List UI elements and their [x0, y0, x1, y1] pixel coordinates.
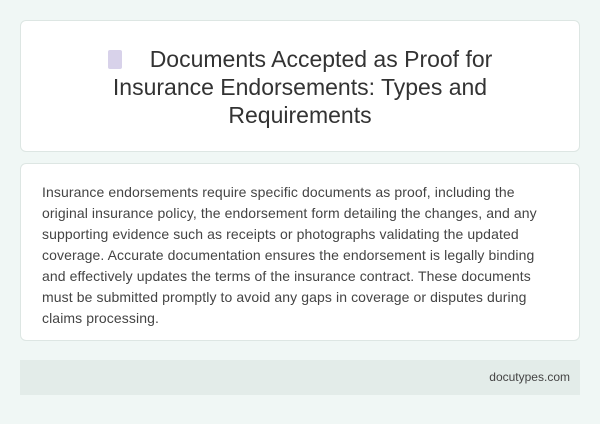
panel: title card	[20, 20, 580, 152]
text block: Insurance endorsements require specific documents as proof, including the original insurance policy, the endorsement form detailing the changes, and any supporting evidence such as receipts or photographs validating the updated coverage. Accurate documentation ensures the endorsement is legally binding and effectively updates the terms of the insurance contract. These documents must be submitted promptly to avoid any gaps in coverage or disputes during claims processing.	[42, 184, 537, 326]
footer text: docutypes.com	[489, 370, 570, 384]
icon: document	[108, 50, 122, 69]
title: Documents Accepted as Proof for Insurance Endorsements: Types and Requirements	[113, 46, 492, 128]
footer	[20, 360, 580, 395]
panel: description	[20, 163, 580, 341]
